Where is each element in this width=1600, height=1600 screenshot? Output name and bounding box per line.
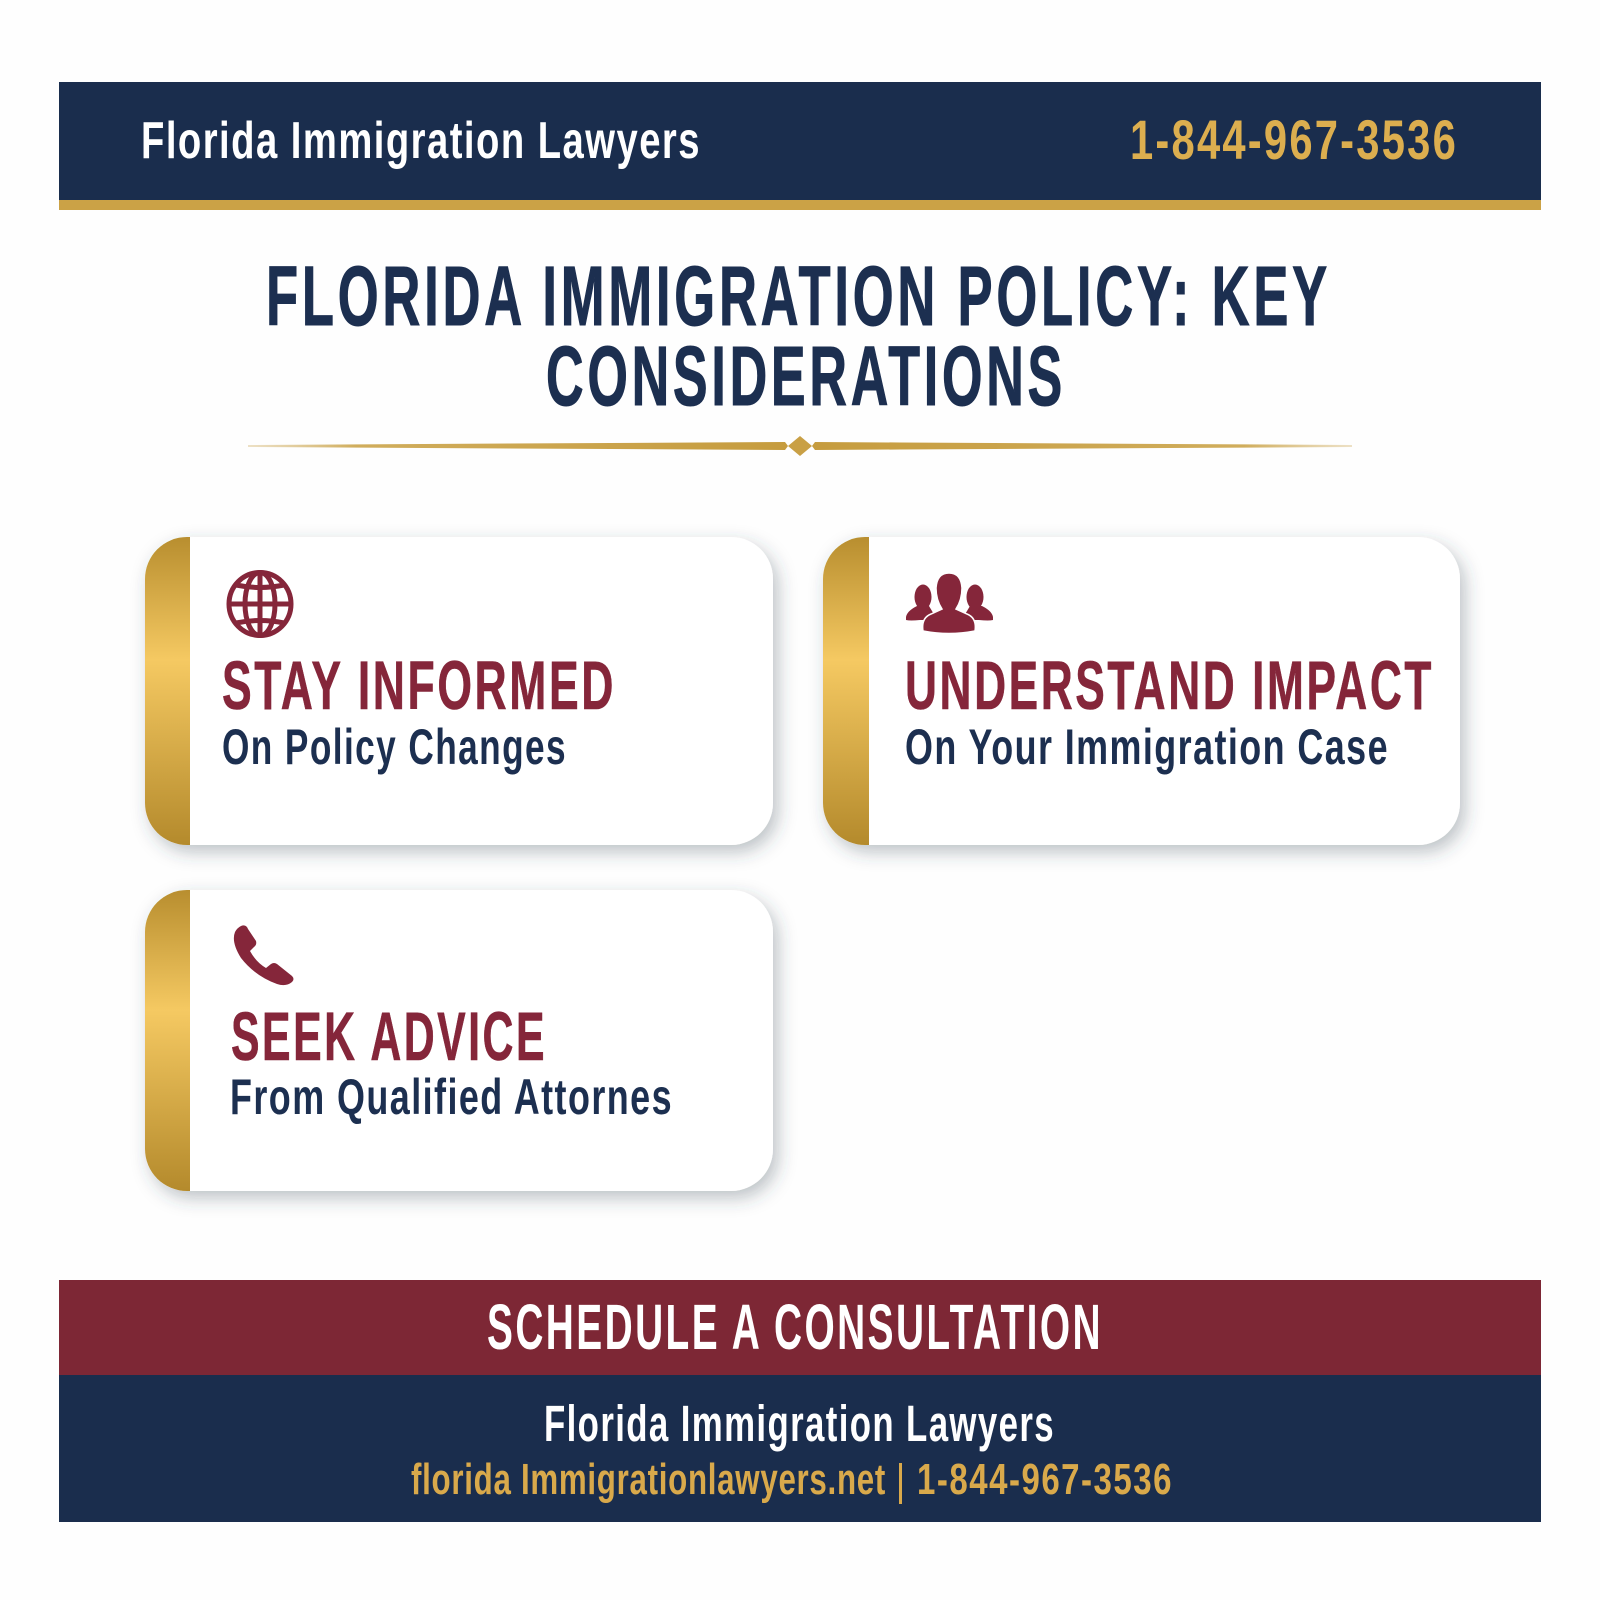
card heading: STAY INFORMED [222, 647, 616, 724]
card heading: SEEK ADVICE [231, 998, 547, 1075]
title [266, 249, 1331, 423]
panel: stay informed [145, 537, 773, 845]
header firm name: Florida Immigration Lawyers [141, 112, 701, 170]
card subheading: On Your Immigration Case [905, 719, 1389, 775]
icon: globe [229, 572, 291, 636]
footer contact block [59, 1375, 1541, 1522]
card subheading: On Policy Changes [222, 719, 567, 775]
icon: people group [906, 573, 993, 634]
title divider with diamond [248, 436, 1352, 456]
panel: seek advice [145, 890, 773, 1191]
panel: understand impact [823, 537, 1460, 845]
call to action banner [59, 1280, 1541, 1375]
header banner [59, 82, 1541, 210]
footer firm name: Florida Immigration Lawyers [544, 1395, 1055, 1452]
title: CONSIDERATIONS [546, 329, 1066, 423]
header phone number: 1-844-967-3536 [1130, 108, 1458, 171]
footer website and phone: florida Immigrationlawyers.net [411, 1455, 886, 1504]
icon: telephone [234, 925, 294, 985]
card subheading: From Qualified Attornes [230, 1069, 673, 1125]
footer website and phone: 1-844-967-3536 [917, 1455, 1173, 1504]
call to action banner: SCHEDULE A CONSULTATION [487, 1291, 1103, 1363]
